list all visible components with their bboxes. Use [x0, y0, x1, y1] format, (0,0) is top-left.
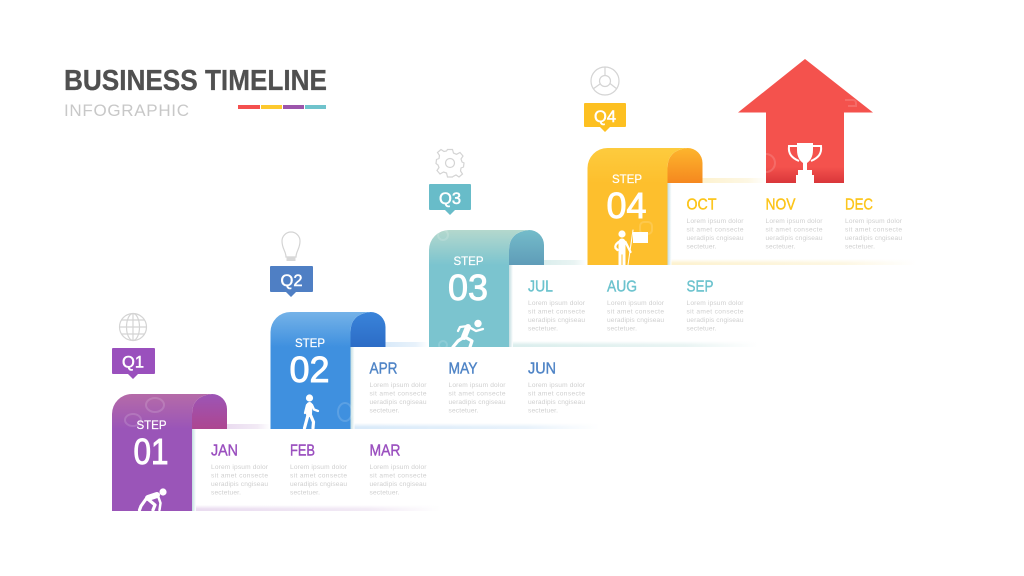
- column: JAN: sectetuer.: [211, 490, 241, 496]
- column: MAY: Lorem ipsum dolor: [448, 382, 506, 389]
- column: MAR: MAR: [370, 442, 400, 460]
- column: OCT: sectetuer.: [686, 244, 717, 250]
- column: NOV: NOV: [766, 196, 796, 214]
- column: NOV: sectetuer.: [766, 244, 796, 250]
- step number: 02: [289, 349, 330, 390]
- step 2: April to June: [270, 312, 600, 429]
- title: BUSINESS TIMELINE: [64, 65, 327, 97]
- step 1: January to March: [112, 394, 442, 511]
- column: APR: sectetuer.: [370, 408, 400, 414]
- column: JUN: ueradipis cngiseau: [528, 399, 585, 406]
- column: JUN: sectetuer.: [528, 408, 558, 414]
- column: MAR: [370, 442, 427, 496]
- column: AUG: sit amet consecte: [607, 308, 664, 316]
- column: APR: [370, 360, 427, 414]
- arrow with trophy: [738, 59, 873, 183]
- column: NOV: ueradipis cngiseau: [766, 235, 823, 242]
- column: JUL: [528, 278, 586, 332]
- column: FEB: Lorem ipsum dolor: [290, 464, 348, 471]
- month panel: [668, 183, 918, 265]
- badge: Q4: [584, 103, 626, 132]
- column: SEP: sectetuer.: [686, 326, 717, 332]
- ribbon front: [588, 148, 688, 265]
- column: MAY: [448, 360, 506, 414]
- step number: 01: [134, 431, 168, 472]
- column: SEP: [686, 278, 744, 332]
- column: SEP: sit amet consecte: [686, 308, 744, 316]
- column: JAN: [211, 442, 269, 496]
- column: AUG: [607, 278, 665, 332]
- badge: Q2: Q2: [280, 272, 303, 290]
- column: DEC: Lorem ipsum dolor: [845, 218, 903, 225]
- column: SEP: Lorem ipsum dolor: [686, 300, 744, 307]
- column: APR: ueradipis cngiseau: [370, 399, 427, 406]
- month panel: [192, 429, 442, 511]
- colour legend bar: [238, 105, 326, 109]
- icon: walking person: [304, 394, 318, 428]
- column: DEC: sectetuer.: [845, 244, 875, 250]
- step number: 03: [448, 267, 488, 308]
- column: JUN: JUN: [528, 360, 556, 378]
- column: APR: Lorem ipsum dolor: [370, 382, 427, 389]
- step number: 04: [606, 185, 647, 226]
- icon: person with flag: [615, 230, 648, 265]
- ribbon front: [429, 230, 529, 347]
- column: JAN: Lorem ipsum dolor: [211, 464, 269, 471]
- watermarks: [125, 222, 652, 426]
- column: AUG: ueradipis cngiseau: [607, 317, 664, 324]
- column: JUN: Lorem ipsum dolor: [528, 382, 586, 389]
- column: MAR: Lorem ipsum dolor: [370, 464, 427, 471]
- column: OCT: [686, 196, 744, 250]
- icon: donut chart: [591, 67, 619, 95]
- column: JUN: [528, 360, 586, 414]
- column: OCT: OCT: [686, 196, 717, 214]
- column: AUG: AUG: [607, 278, 637, 296]
- column: FEB: ueradipis cngiseau: [290, 481, 347, 488]
- icon: light bulb: [282, 232, 300, 261]
- step 3: July to September: [429, 230, 759, 347]
- column: NOV: sit amet consecte: [766, 226, 823, 234]
- step 4: October to December: [588, 148, 918, 265]
- column: DEC: sit amet consecte: [845, 226, 902, 234]
- step label: STEP: [612, 174, 642, 186]
- column: JUL: JUL: [528, 278, 553, 296]
- column: MAR: sectetuer.: [370, 490, 400, 496]
- column: JAN: JAN: [211, 442, 238, 460]
- subtitle: INFOGRAPHIC: [64, 101, 189, 120]
- column: FEB: sit amet consecte: [290, 472, 347, 480]
- column: JUN: sit amet consecte: [528, 390, 585, 398]
- column: SEP: ueradipis cngiseau: [686, 317, 744, 324]
- column: MAR: sit amet consecte: [370, 472, 427, 480]
- column: APR: sit amet consecte: [370, 390, 427, 398]
- column: FEB: FEB: [290, 442, 315, 460]
- column: MAY: ueradipis cngiseau: [448, 399, 506, 406]
- column: JUL: sit amet consecte: [528, 308, 585, 316]
- column: DEC: [845, 196, 903, 250]
- step label: STEP: [453, 256, 484, 268]
- column: NOV: Lorem ipsum dolor: [766, 218, 823, 225]
- icon: runner: [453, 320, 483, 347]
- badge: Q1: Q1: [122, 354, 144, 372]
- ribbon back fold: [350, 312, 386, 347]
- badge: Q1: [112, 348, 155, 379]
- icon: crouching runner: [140, 488, 167, 510]
- badge: Q3: [429, 184, 471, 215]
- step label: STEP: [136, 420, 167, 432]
- ribbon back fold: [192, 394, 227, 429]
- icon: trophy: [789, 143, 821, 183]
- column: JUL: sectetuer.: [528, 326, 558, 332]
- badge: Q2: [270, 266, 313, 297]
- ribbon front: [112, 394, 212, 511]
- column: MAY: sit amet consecte: [448, 390, 506, 398]
- badge: Q3: Q3: [439, 190, 461, 208]
- column: SEP: SEP: [686, 278, 714, 296]
- column: AUG: Lorem ipsum dolor: [607, 300, 665, 307]
- step label: STEP: [295, 338, 325, 350]
- column: JAN: sit amet consecte: [211, 472, 268, 480]
- column: FEB: sectetuer.: [290, 490, 320, 496]
- column: JUL: Lorem ipsum dolor: [528, 300, 586, 307]
- column: JUL: ueradipis cngiseau: [528, 317, 585, 324]
- column: NOV: [766, 196, 823, 250]
- column: JAN: ueradipis cngiseau: [211, 481, 268, 488]
- column: MAY: sectetuer.: [448, 408, 479, 414]
- ribbon back fold: [668, 148, 702, 183]
- column: APR: APR: [370, 360, 398, 378]
- column: OCT: sit amet consecte: [686, 226, 744, 234]
- column: FEB: [290, 442, 348, 496]
- column: MAR: ueradipis cngiseau: [370, 481, 427, 488]
- month panel: [509, 265, 759, 347]
- column: OCT: Lorem ipsum dolor: [686, 218, 744, 225]
- column: AUG: sectetuer.: [607, 326, 637, 332]
- ribbon back fold: [509, 230, 544, 265]
- icon: gear: [436, 150, 464, 177]
- column: DEC: DEC: [845, 196, 873, 214]
- column: DEC: ueradipis cngiseau: [845, 235, 902, 242]
- column: OCT: ueradipis cngiseau: [686, 235, 744, 242]
- icon: globe: [120, 314, 146, 340]
- badge: Q4: Q4: [594, 108, 616, 126]
- ribbon front: [270, 312, 370, 429]
- column: MAY: MAY: [448, 360, 478, 378]
- month panel: [350, 347, 600, 429]
